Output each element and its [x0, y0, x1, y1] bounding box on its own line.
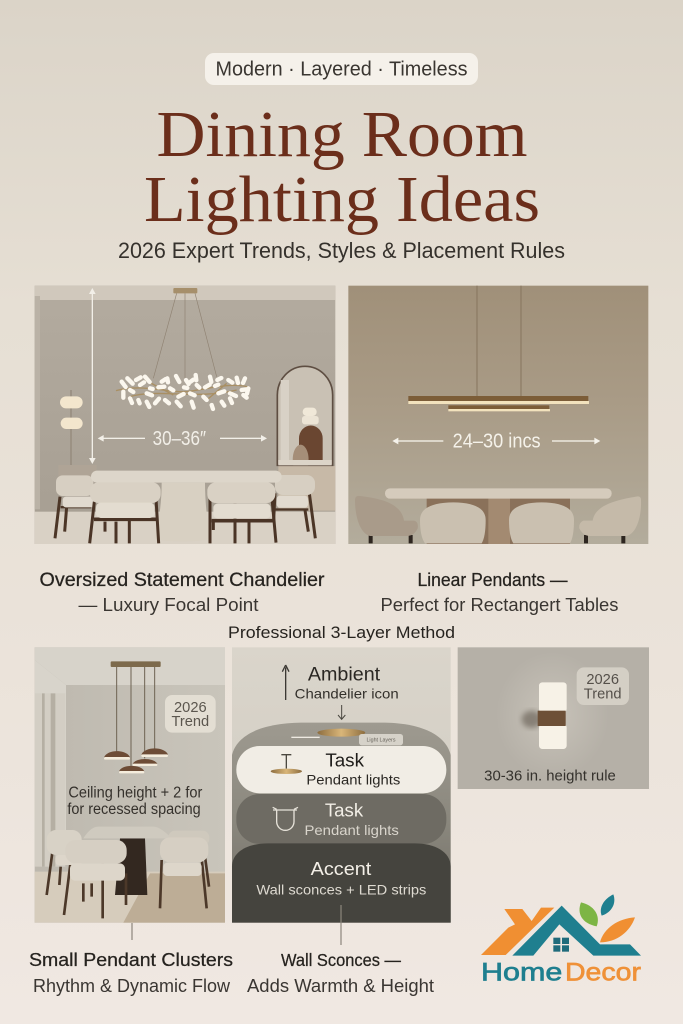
- wordmark: Home: [481, 960, 562, 987]
- dome layer: [232, 723, 451, 923]
- subtitle: 2026 Expert Trends, Styles & Placement Rules: [118, 238, 565, 263]
- caption: oversized statement chandelier: Oversized Statement Chandelier: [40, 570, 325, 591]
- caption: linear pendants: Linear Pendants —: [418, 570, 568, 590]
- panel: oversized chandelier photo: [35, 286, 335, 544]
- title: Dining Room: [156, 98, 528, 171]
- task layer mid: Pendant lights: [304, 822, 399, 838]
- credenza: [278, 466, 335, 511]
- height arrow: [89, 288, 96, 464]
- ceiling height note: Ceiling height + 2 for: [68, 784, 202, 801]
- task layer mid: Task: [325, 800, 364, 821]
- ambient layer: [282, 665, 403, 745]
- task layer light: Task: [325, 750, 365, 771]
- arched mirror: [277, 366, 333, 465]
- height rule note: 30-36 in. height rule: [484, 769, 616, 785]
- wall: [458, 647, 649, 789]
- 2026 trend badge: Trend: [171, 714, 209, 730]
- caption: wall sconces: [247, 950, 434, 996]
- task layer mid: [236, 794, 446, 844]
- caption: oversized statement chandelier: — Luxury Focal Point: [78, 594, 258, 615]
- ceiling height note: [67, 784, 202, 818]
- room: [35, 647, 225, 923]
- 2026 trend badge: 2026: [174, 700, 207, 716]
- caption: linear pendants: Perfect for Rectangert Tables: [380, 594, 618, 615]
- width measurement: 24–30 incs: [453, 431, 541, 453]
- panel: wall sconce photo: [458, 647, 649, 789]
- ambient layer: Light Layers: [366, 737, 396, 743]
- task layer light: [236, 746, 446, 793]
- panel background: [232, 647, 451, 923]
- accent layer: [232, 843, 451, 923]
- wall: [348, 286, 648, 544]
- dining table: [385, 488, 612, 544]
- tagline pill: Modern · Layered · Timeless: [216, 58, 468, 80]
- title: [144, 98, 540, 236]
- caption: small pendant clusters: Rhythm & Dynamic Flow: [33, 975, 231, 996]
- ceiling height note: for recessed spacing: [67, 801, 201, 818]
- width measurement: 30–36″: [153, 428, 206, 450]
- wall and room: [35, 286, 335, 544]
- panel: small pendant clusters photo: [35, 647, 225, 923]
- 2026 trend badge: 2026: [586, 672, 619, 688]
- panel: 3-layer method diagram: [232, 647, 451, 923]
- icon: leaves: [579, 894, 635, 942]
- 2026 trend badge: Trend: [584, 686, 622, 702]
- task layer light: Pendant lights: [306, 771, 400, 787]
- wordmark: Decor: [565, 960, 641, 987]
- square dining table: [83, 827, 172, 895]
- front chairs: [90, 482, 276, 543]
- panel: linear pendants photo: [348, 286, 648, 544]
- title: Lighting Ideas: [144, 163, 540, 236]
- connector lines: [132, 905, 341, 945]
- heading: professional 3-layer method: Professional 3-Layer Method: [228, 623, 455, 642]
- logo: HomeDecor: [481, 894, 641, 987]
- accent layer: Accent: [311, 858, 372, 879]
- tagline pill: [205, 53, 478, 85]
- glow: [496, 652, 609, 778]
- chairs: [47, 830, 209, 918]
- armchairs: [355, 496, 641, 543]
- accent layer: Wall sconces + LED strips: [256, 881, 426, 897]
- icon: orange Y: [481, 908, 554, 955]
- width measurement: [98, 428, 267, 450]
- sconce: [522, 682, 567, 749]
- icon: window: [553, 938, 569, 952]
- caption: oversized statement chandelier: [40, 570, 325, 615]
- round dining table: [91, 471, 282, 542]
- ambient layer: Chandelier icon: [295, 686, 399, 702]
- width measurement: [392, 431, 600, 453]
- far chairs: [55, 475, 315, 538]
- 2026 trend badge: [165, 695, 216, 733]
- 2026 trend badge: [577, 667, 629, 705]
- floor lamp: [58, 390, 97, 480]
- pendant cords: [477, 286, 521, 397]
- caption: wall sconces: Adds Warmth & Height: [247, 975, 434, 996]
- pendant cluster: [104, 661, 168, 773]
- caption: linear pendants: [380, 570, 618, 615]
- ambient layer: Ambient: [308, 665, 381, 686]
- icon: teal roof: [512, 906, 641, 956]
- linear pendant bars: [408, 396, 589, 411]
- caption: small pendant clusters: Small Pendant Clusters: [29, 949, 233, 970]
- caption: small pendant clusters: [29, 949, 233, 996]
- caption: wall sconces: Wall Sconces —: [281, 950, 401, 970]
- chandelier: [116, 288, 250, 409]
